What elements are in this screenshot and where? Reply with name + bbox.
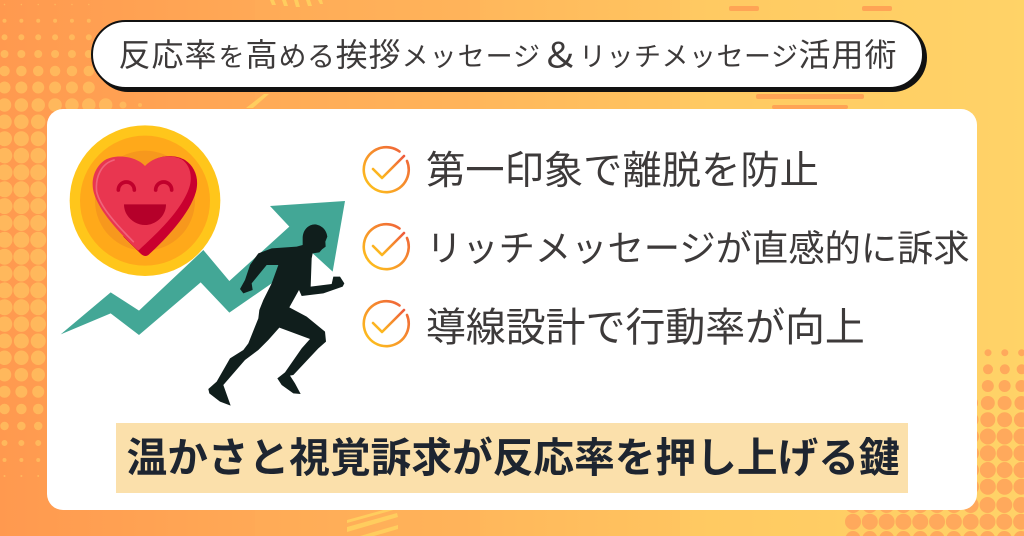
icon: smiling heart badge <box>70 125 220 276</box>
check icons <box>362 146 410 348</box>
icon: check 2 <box>364 224 409 269</box>
icon: check 1 <box>364 147 409 192</box>
point 1 text: 第一印象で離脱を防止 <box>426 149 819 193</box>
main white panel <box>47 109 977 510</box>
point 2 text: リッチメッセージが直感的に訴求 <box>426 228 970 269</box>
runner silhouette <box>208 224 344 406</box>
illustration: heart, growth arrow and runner <box>60 125 345 406</box>
growth arrow <box>61 201 345 335</box>
highlight banner <box>116 423 908 493</box>
banner text: 温かさと視覚訴求が反応率を押し上げる鍵 <box>126 435 900 481</box>
title pill <box>91 20 924 89</box>
title text: 反応率を高める挨拶メッセージ リッチメッセージ活用術 <box>118 37 898 73</box>
point 3 text: 導線設計で行動率が向上 <box>426 306 865 350</box>
icon: check 3 <box>364 301 409 346</box>
title text: ＆ <box>541 37 579 75</box>
